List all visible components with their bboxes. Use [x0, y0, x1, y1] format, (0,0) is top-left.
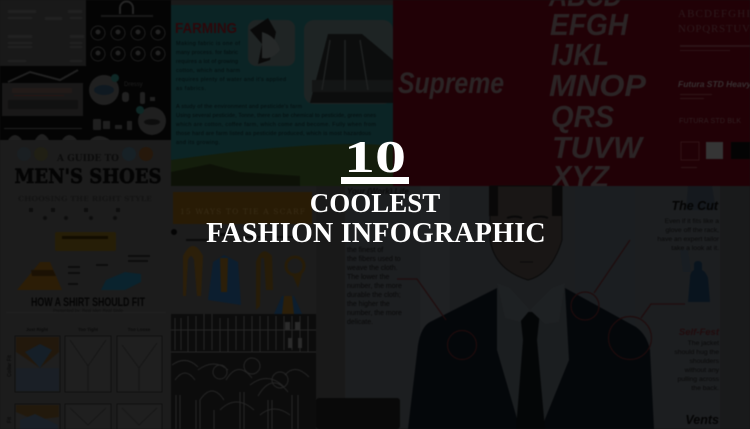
panel: red Futura type specimen: IJKL	[551, 37, 609, 72]
panel: suit fit notes: The jacket	[688, 340, 719, 347]
panel: suit guide text column: the higher the	[347, 301, 390, 308]
title line: fashion infographic: FASHION INFOGRAPHIC	[206, 218, 546, 249]
panel: suit fit notes: Self-Fest	[679, 327, 720, 338]
panel: farming	[171, 0, 393, 186]
panel: red Futura type specimen: QRS	[551, 99, 614, 134]
panel: how a shirt should fit: Too Loose	[128, 327, 151, 332]
panel: engraving street illustration	[171, 314, 316, 429]
panel: red Futura type specimen: TUVW	[552, 130, 645, 165]
panel: red Futura type specimen: XYZ	[550, 159, 610, 194]
panel: farming: cotton, which and harm	[176, 68, 240, 74]
panel: farming: Making fabric is one of	[176, 41, 240, 47]
panel: store photo	[0, 66, 86, 140]
panel: suit guide text column: the finest of	[347, 247, 383, 254]
panel: suit guide text column: The lower the	[347, 274, 390, 281]
panel: farming: as fabrics.	[176, 86, 206, 92]
panel: suit guide text column: weave the cloth.	[346, 265, 398, 272]
panel: suit fit notes: should hug the	[674, 349, 719, 356]
panel: red Futura type specimen: FUTURA STD BLK	[679, 118, 741, 125]
illustration: man in suit	[397, 186, 685, 429]
panel: how a shirt should fit: Too Tight	[78, 327, 99, 332]
panel: red Futura type specimen: ABCDEFGHI	[678, 8, 750, 20]
panel: red Futura type specimen: Futura STD Heavy	[678, 79, 750, 89]
panel: how a shirt should fit: HOW A SHIRT SHOULD FIT	[31, 297, 145, 309]
panel: how a shirt should fit: Fit	[7, 417, 13, 423]
panel: suit fit notes: Even if it fits like a	[665, 218, 719, 225]
panel: how a shirt should fit: Presented by: Real Men Real Style	[53, 308, 124, 313]
panel: red Futura type specimen: NOPQRSTUV	[678, 23, 750, 35]
title line: coolest: COOLEST	[310, 188, 440, 218]
panel: scarf guide	[171, 186, 345, 429]
panel: farming: FARMING	[175, 20, 237, 37]
panel: farming: many process. for fabric	[176, 50, 238, 56]
panel: suit guide text column	[316, 186, 750, 429]
panel: farming: requires a lot of growing	[176, 59, 238, 65]
panel: a guide to men's shoes	[0, 134, 171, 290]
panel: red Futura type specimen	[393, 0, 750, 194]
panel: suit guide text column: delicate.	[347, 319, 373, 326]
panel: how a shirt should fit: Collar Fit	[7, 355, 13, 377]
panel: red Futura type specimen: EFGH	[550, 7, 629, 42]
panel: farming: those hard are farm listed as pesticide produced, which is most hazardous	[176, 131, 371, 137]
panel: suit guide text column: number, the more	[347, 310, 402, 317]
panel: suit guide text column: number, the more	[347, 283, 402, 290]
panel: scarf guide: 15 WAYS TO TIE A SCARF	[180, 207, 305, 216]
panel: how a shirt should fit: Just Right	[26, 327, 49, 332]
panel: farming: which are cotton, coffee farm, which come and become. Fully when from	[175, 122, 376, 128]
panel: red Futura type specimen: MNOP	[549, 68, 646, 103]
panel: red Futura type specimen: Supreme	[398, 67, 504, 100]
panel: suit fit notes	[657, 186, 720, 427]
panel: a guide to men's shoes: A GUIDE TO	[56, 154, 119, 164]
panel: suit fit notes: the back.	[691, 385, 719, 392]
panel: a guide to men's shoes: MEN'S SHOES	[14, 164, 162, 188]
panel: suit fit notes: have an expert tailor	[657, 236, 720, 243]
panel: farming: requires plenty of water and it's applied	[176, 77, 286, 83]
panel: how a shirt should fit	[0, 290, 171, 429]
panel: farming: and its growing.	[176, 140, 220, 146]
panel: a guide to men's shoes: CHOOSING THE RIGHT STYLE	[18, 195, 152, 203]
panel: farming: Using several pesticide, Tonne, there can be chemical to pesticide, green ones	[176, 113, 376, 119]
panel: table sheet top left	[0, 0, 86, 66]
panel: suit fit notes: glove off the rack,	[665, 227, 719, 234]
panel: black grooming chart	[86, 0, 171, 140]
panel: suit guide text column: the fibers used to	[347, 256, 401, 263]
title number: 10	[344, 131, 406, 182]
panel: suit fit notes: shoulders	[690, 358, 720, 365]
panel: farming: A study of the environment and pesticide's farm	[176, 104, 302, 110]
panel: suit guide text column: durable the cloth;	[347, 292, 401, 299]
panel: suit fit notes: pulling across	[677, 376, 720, 383]
panel: suit fit notes: Vents	[685, 413, 719, 427]
panel: suit fit notes: without any	[684, 367, 720, 374]
panel: suit fit notes: take a look at it.	[671, 245, 719, 252]
panel: suit guide text column: Your (Work) Life	[347, 187, 409, 196]
panel: suit fit notes: The Cut	[671, 199, 719, 213]
panel: black grooming chart: Dressy	[124, 82, 143, 88]
title underline	[341, 177, 409, 184]
